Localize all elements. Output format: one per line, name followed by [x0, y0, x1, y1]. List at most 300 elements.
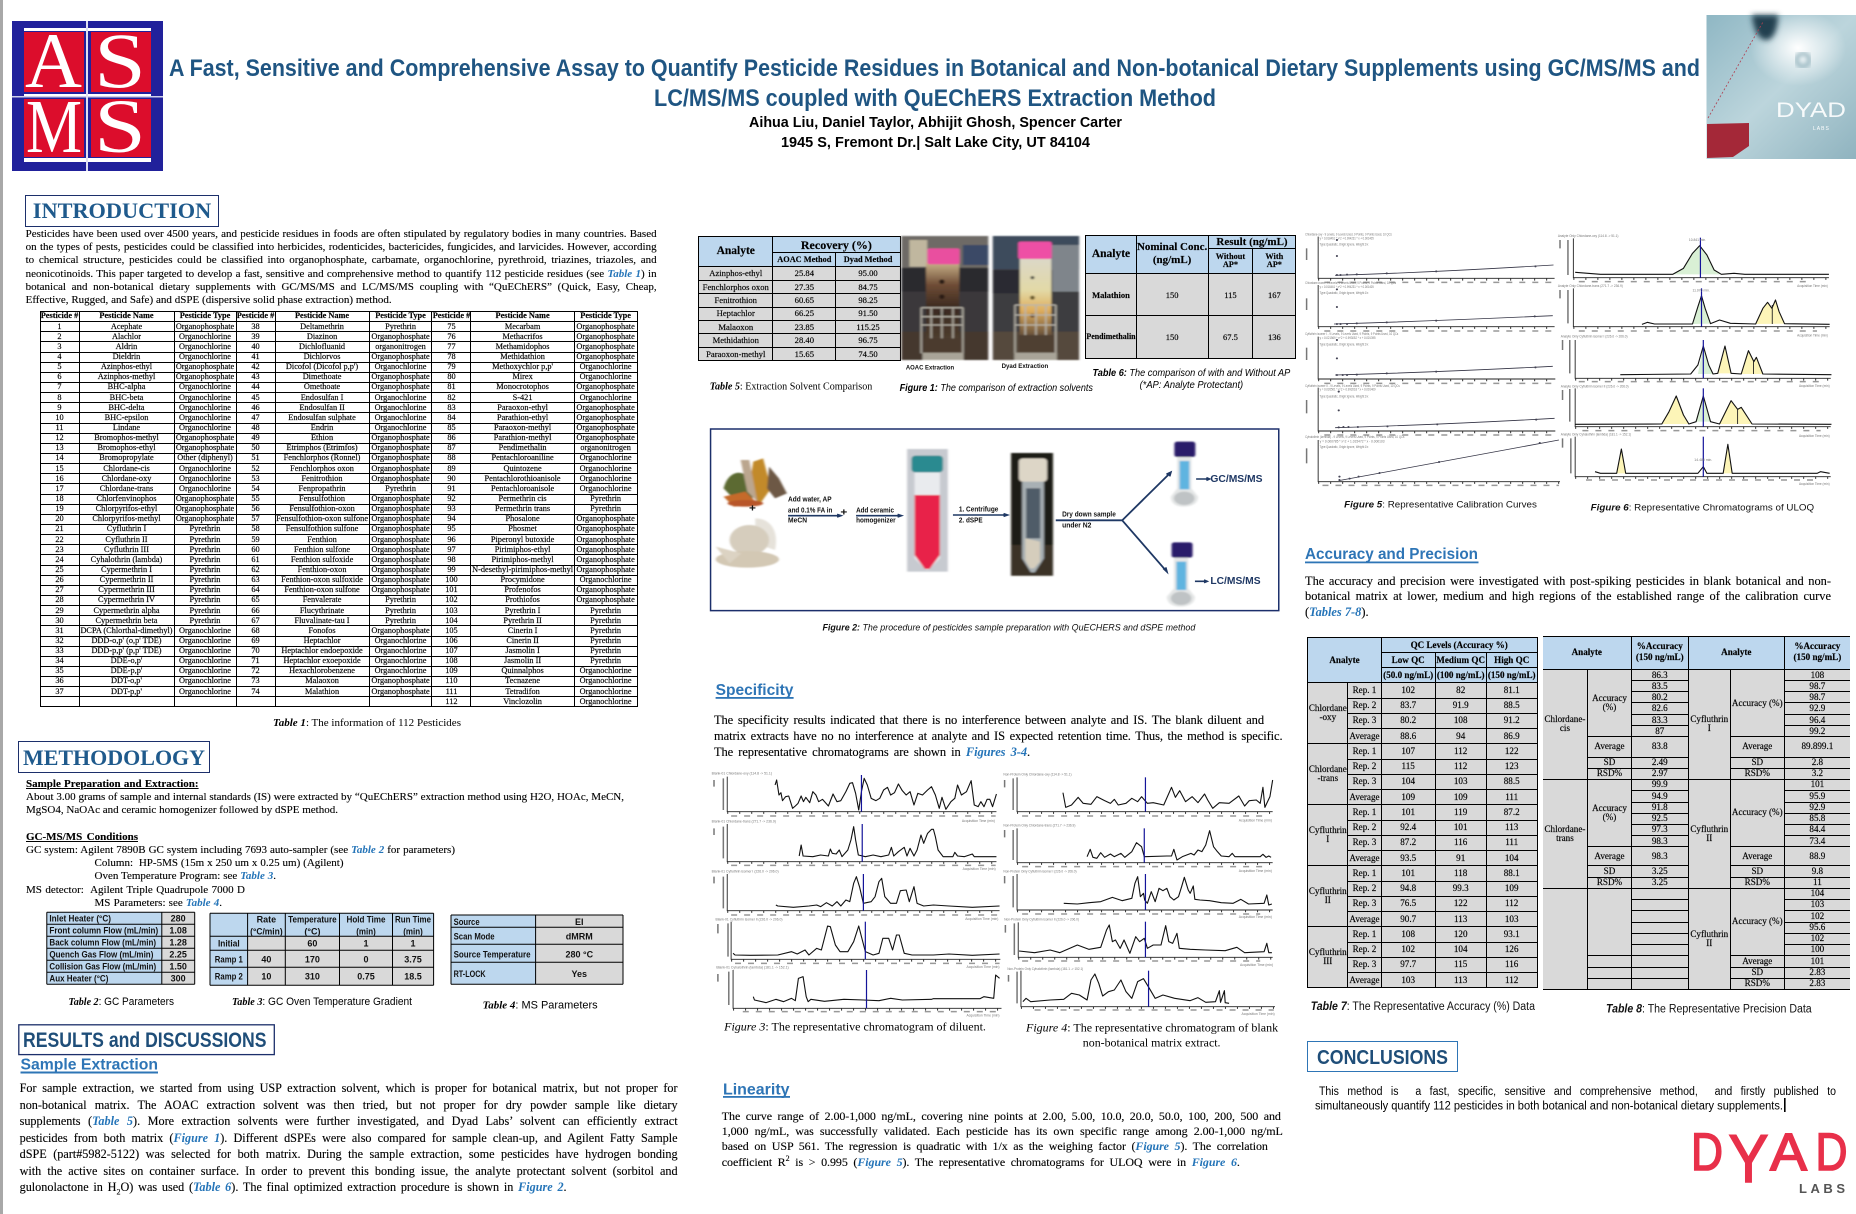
table 8: representative precision data: 108 — [1811, 670, 1824, 680]
table 1: 112 pesticides: Pesticide Name — [99, 312, 154, 320]
table 7: representative accuracy data: 104 — [1454, 944, 1468, 954]
table 1: 112 pesticides: Organophosphate — [176, 372, 234, 381]
table 1: 112 pesticides: Organochlorine — [179, 393, 231, 402]
table 4: MS parameters: Source — [454, 917, 480, 927]
caption: figure 6: Figure 6: Representative Chromatograms of ULOQ — [1591, 503, 1815, 514]
table 8: representative precision data: Average — [1742, 851, 1772, 861]
table 1: 112 pesticides: 35 — [55, 666, 64, 675]
chart: calibration cyfluthrin isomer I — [1305, 332, 1555, 383]
table 8: representative precision data: 98.3 — [1652, 851, 1668, 861]
table 1: 112 pesticides: Fenthion-oxon sulfone — [284, 585, 360, 594]
table 1: 112 pesticides: Pyrethrin — [190, 595, 220, 604]
table 1: 112 pesticides: 40 — [251, 342, 260, 351]
table 8: representative precision data: 102 — [1811, 911, 1824, 921]
table 1: 112 pesticides: Organophosphate — [576, 524, 635, 533]
table 1: 112 pesticides: 48 — [251, 423, 260, 432]
chart: diluent cyfluthrin isomer II: Blank-01 Cyfluthrin isomer II (226.0 -> 206.0) — [716, 917, 783, 921]
table 1: 112 pesticides: Omethoate — [304, 382, 340, 391]
table 1: 112 pesticides: Organophosphate — [371, 575, 430, 584]
table 1: 112 pesticides: Pyrethrin — [385, 616, 416, 625]
table 8: representative precision data: Cyfluthrin — [1690, 824, 1728, 834]
table 7: representative accuracy data: 97.7 — [1400, 959, 1416, 969]
text block: GC-MS/MS conditions: Column: HP-5MS (15m x 250 um x 0.25 um) (Agilent) — [94, 857, 344, 869]
table 1: 112 pesticides: 108 — [445, 656, 458, 665]
table 3: GC oven temperature gradient: (°C) — [304, 926, 320, 936]
table 1: 112 pesticides: Alachlor — [112, 332, 141, 341]
title: LC/MS/MS coupled with QuEChERS Extraction Method — [654, 85, 1216, 112]
table 1: 112 pesticides: Methoxychlor p,p' — [492, 362, 553, 371]
table 1: 112 pesticides: Tecnazene — [505, 677, 540, 685]
caption: figure 2: Figure 2: The procedure of pesticides sample preparation with QuECHERS and dSPE method — [822, 623, 1196, 633]
table 1: 112 pesticides: Dieldrin — [113, 352, 140, 361]
table 1: 112 pesticides: 8 — [57, 393, 62, 402]
figure 6: chromatograms of ULOQ — [1558, 234, 1831, 514]
chart: matrix cyhalothrin — [1007, 966, 1275, 1016]
table 1: 112 pesticides: Mirex — [512, 372, 533, 381]
table 1: 112 pesticides: Fensulfothion-oxon sulfone — [276, 514, 368, 523]
table 1: 112 pesticides: Organochlorine — [580, 484, 632, 493]
table 8: representative precision data: 98.3 — [1652, 836, 1668, 846]
table 7: representative accuracy data: Rep. 1 — [1353, 685, 1376, 695]
table 1: 112 pesticides: 100 — [445, 575, 458, 584]
table 5: extraction solvent comparison — [698, 236, 901, 361]
chart: diluent cyfluthrin isomer II: Acquisition Time (min) — [966, 964, 1000, 969]
table 8: representative precision data: 92.9 — [1809, 703, 1825, 713]
chart: diluent chlordane-trans: Acquisition Time (min) — [963, 866, 996, 871]
table 8: representative precision data: %Accuracy — [1637, 641, 1683, 651]
table 1: 112 pesticides: Organophosphate — [371, 494, 430, 503]
text block: introduction: Effective, Rugged, and Safe) and dSPE (dispersive solid phase extraction) method. — [26, 294, 392, 306]
chart: diluent chlordane-trans: Blank-01 Chlordane-trans (271.7 -> 236.9) — [712, 819, 776, 824]
table 1: 112 pesticides: 86 — [447, 433, 456, 442]
table 7: representative accuracy data: 82 — [1456, 685, 1465, 695]
caption: table 6: Table 6: The comparison of with and Without AP — [1093, 368, 1291, 379]
table 1: 112 pesticides: Jasmolin II — [504, 656, 541, 665]
table 1: 112 pesticides: 99 — [447, 565, 456, 574]
chart: ULOQ cyfluthrin isomer I: Analyte Only Cyfluthrin isomer I (226.0 -> 206.0) — [1561, 334, 1628, 338]
icon: LC vial — [1167, 542, 1195, 607]
text block: sample extraction: pesticides from both matrix (Figure 1). Different dSPEs were also compared for sample clean-up, and Agilent Fatty Sample — [20, 1131, 678, 1145]
table 8: representative precision data: 98.7 — [1809, 681, 1825, 691]
chart: calibration chlordane-oxy: Type:Quadratic, Origin:Ignore, Weight:1/x — [1320, 242, 1368, 246]
table 8: representative precision data: 95.6 — [1809, 922, 1825, 932]
chart: matrix cyfluthrin isomer I: Non-Protein Only Cyfluthrin isomer I (226.0 -> 206.0) — [1003, 869, 1077, 874]
table 1: 112 pesticides: 67 — [251, 616, 260, 625]
table 1: 112 pesticides: Pirimiphos-methyl — [491, 555, 554, 564]
table 7: representative accuracy data: II — [1325, 895, 1331, 905]
table 1: 112 pesticides: 85 — [447, 423, 456, 432]
table 1: 112 pesticides: 81 — [447, 382, 456, 391]
table 5: extraction solvent comparison: 91.50 — [858, 308, 878, 318]
table 1: 112 pesticides: 75 — [447, 322, 456, 331]
table 1: 112 pesticides: 42 — [251, 362, 260, 371]
table 1: 112 pesticides: Organophosphate — [576, 352, 635, 361]
table 3: GC oven temperature gradient: 310 — [305, 971, 320, 981]
table 7: representative accuracy data: Rep. 2 — [1353, 700, 1376, 710]
heading: sample extraction: Sample Extraction — [20, 1056, 158, 1074]
table 1: 112 pesticides: DDT-p,p' — [111, 687, 142, 696]
table 7: representative accuracy data: Average — [1349, 914, 1380, 924]
table 7: representative accuracy data: 94.8 — [1400, 883, 1416, 893]
table 1: 112 pesticides: Organophosphate — [371, 565, 430, 574]
table 5: extraction solvent comparison: Dyad Method — [844, 255, 892, 264]
table 7: representative accuracy data: 109 — [1505, 883, 1519, 893]
chart: matrix cyfluthrin isomer I — [1003, 869, 1273, 919]
chart: calibration cyfluthrin isomer I: Cyfluthrin isomer I - 9 Levels, 9 Levels Used, 9 Points, 9 Points Used, 10 QCs — [1305, 332, 1398, 336]
table 1: 112 pesticides — [40, 311, 638, 707]
table 1: 112 pesticides: Organochlorine — [580, 677, 632, 685]
table 7: representative accuracy data: 112 — [1505, 975, 1518, 985]
table 5: extraction solvent comparison: Fenitrothion — [714, 295, 757, 305]
table 1: 112 pesticides: 61 — [251, 555, 260, 564]
figure 2 frame — [711, 429, 1279, 611]
chart: diluent cyhalothrin — [716, 965, 1001, 1018]
table 8: representative precision data: Average — [1742, 956, 1772, 966]
table 1: 112 pesticides: 73 — [251, 677, 260, 685]
panel: figures 5 and 6 — [1305, 232, 1832, 514]
table 7: representative accuracy data: 112 — [1454, 761, 1467, 771]
table 7: representative accuracy data: Rep. 1 — [1353, 807, 1376, 817]
table 1: 112 pesticides: 62 — [251, 565, 260, 574]
text block: GC-MS/MS conditions: MS Parameters: see Table 4. — [94, 897, 222, 909]
table 7: representative accuracy data: (150 ng/mL) — [1488, 670, 1536, 680]
text block: linearity: coefficient R2 is > 0.995 (Figure 5). The representative chromatograms for ULOQ were in Figure 6. — [722, 1154, 1240, 1169]
table 3: GC oven temperature gradient: Run Time — [395, 914, 431, 924]
table 5: extraction solvent comparison: Heptachlor — [717, 308, 755, 318]
table 4: MS parameters: Source Temperature — [454, 950, 531, 960]
table 1: 112 pesticides: Organochlorine — [179, 484, 231, 493]
table 8: representative precision data: trans — [1556, 833, 1574, 843]
panel: header — [12, 10, 1856, 171]
table 2: GC parameters — [47, 912, 195, 984]
table 2: GC parameters: Inlet Heater (°C) — [49, 914, 111, 924]
table 8: representative precision data: 89.899.1 — [1801, 741, 1833, 751]
chart: diluent cyfluthrin isomer I — [712, 869, 1000, 921]
table 7: representative accuracy data: 111 — [1505, 792, 1518, 802]
table 1: 112 pesticides: 80 — [447, 372, 456, 381]
table 1: 112 pesticides: 90 — [447, 474, 456, 483]
table 3: GC oven temperature gradient — [210, 913, 434, 985]
table 1: 112 pesticides: Organochlorine — [375, 646, 426, 655]
table 1: 112 pesticides: Cyfluthrin III — [104, 545, 149, 554]
step: add ceramic: homogenizer — [856, 515, 896, 524]
table 7: representative accuracy data: 102 — [1401, 944, 1415, 954]
table 6: with and without analyte protectant: 150 — [1166, 332, 1178, 342]
table 1: 112 pesticides: Pyrethrin — [190, 524, 220, 533]
table 1: 112 pesticides: 44 — [251, 382, 260, 391]
table 8: representative precision data: (150 ng/mL) — [1636, 652, 1684, 662]
table 4: MS parameters: 280 °C — [565, 950, 594, 960]
chart: calibration cyfluthrin isomer I: Type:Quadratic, Origin:Ignore, Weight:1/x — [1320, 342, 1368, 346]
text block: GC-MS/MS conditions: GC-MS/MS Conditions — [26, 831, 138, 843]
chart: ULOQ chlordane-oxy: Analyte Only Chlordane-oxy (114.8 -> 51.1) — [1558, 234, 1619, 238]
text block: GC-MS/MS conditions: Oven Temperature Program: see Table 3. — [94, 870, 276, 882]
table 7: representative accuracy data: 88.1 — [1504, 868, 1520, 878]
table 1: 112 pesticides: Organochlorine — [179, 413, 231, 422]
table 1: 112 pesticides: 27 — [55, 585, 64, 594]
table 1: 112 pesticides: Acephate — [111, 322, 142, 331]
table 1: 112 pesticides: 70 — [251, 646, 260, 655]
table 1: 112 pesticides: 17 — [55, 484, 64, 493]
table 1: 112 pesticides: Organophosphate — [371, 677, 430, 685]
table 1: 112 pesticides: DDD-p,p' (p,p' TDE) — [91, 646, 162, 655]
table 6: with and without analyte protectant: Nominal Conc. — [1137, 241, 1207, 253]
table 2: GC parameters: 2.25 — [169, 950, 187, 960]
table 5: extraction solvent comparison: 66.25 — [795, 308, 814, 318]
table 1: 112 pesticides: 3 — [57, 342, 62, 351]
table 1: 112 pesticides: 16 — [55, 474, 64, 483]
table 2: GC parameters: 1.28 — [169, 938, 187, 948]
table 1: 112 pesticides: Organochlorine — [375, 403, 426, 412]
table 1: 112 pesticides: Organochlorine — [179, 687, 231, 696]
table 7: representative accuracy data: (100 ng/mL) — [1437, 670, 1485, 680]
table 7: representative accuracy data: 112 — [1454, 746, 1467, 756]
table 1: 112 pesticides: 47 — [251, 413, 260, 422]
icon: Dyad Labs logo: D — [1816, 1123, 1848, 1182]
table 1: 112 pesticides: Chlorpyrifos-methyl — [92, 514, 161, 523]
table 3: GC oven temperature gradient: 40 — [261, 954, 271, 964]
table 1: 112 pesticides: Pyrethrin — [385, 606, 416, 614]
table 1: 112 pesticides: 59 — [251, 535, 260, 544]
table 8: representative precision data: Average — [1594, 851, 1625, 861]
table 1: 112 pesticides: 84 — [447, 413, 456, 422]
table 5: extraction solvent comparison: 28.40 — [795, 335, 814, 345]
table 3: GC oven temperature gradient: 170 — [305, 954, 320, 964]
table 1: 112 pesticides: Jasmolin I — [505, 646, 540, 655]
chart: matrix chlordane-trans — [1003, 823, 1273, 873]
table 1: 112 pesticides: Organochlorine — [179, 332, 231, 341]
table 3: GC oven temperature gradient: (min) — [403, 926, 423, 936]
table 1: 112 pesticides: Deltamethrin — [300, 322, 344, 331]
caption: figure 1: Figure 1: The comparison of extraction solvents — [900, 383, 1093, 394]
step: add water: Add water, AP — [788, 494, 832, 503]
table 7: representative accuracy data: 76.5 — [1400, 898, 1416, 908]
text block: GC-MS/MS conditions: GC system: Agilent 7890B GC system including 7693 auto-sampler (see Table 2 for parameters) — [26, 844, 455, 856]
table 1: 112 pesticides: Pyrethrin — [385, 595, 416, 604]
table 1: 112 pesticides: 26 — [55, 575, 64, 584]
authors and address: Aihua Liu, Daniel Taylor, Abhijit Ghosh, Spencer Carter — [749, 115, 1122, 131]
chart: calibration chlordane-trans — [1305, 281, 1555, 331]
table 8: representative precision data: RSD% — [1745, 768, 1770, 778]
table 8: representative precision data — [1543, 636, 1850, 990]
table 1: 112 pesticides: Flucythrinate — [300, 606, 344, 614]
text block: linearity: based on USP 561. The regression is quadratic with 1/x as the weighing factor (Figure 5). The correlation — [722, 1139, 1268, 1153]
table 1: 112 pesticides: Organochlorine — [179, 636, 231, 645]
table 1: 112 pesticides: Organochlorine — [580, 393, 632, 402]
table 8: representative precision data: Analyte — [1572, 647, 1602, 657]
table 1: 112 pesticides: Bromopropylate — [99, 453, 154, 462]
text block: specificity — [714, 713, 1282, 758]
table 1: 112 pesticides: Organophosphate — [176, 362, 234, 371]
table 1: 112 pesticides: 51 — [251, 453, 260, 462]
table 1: 112 pesticides: Organophosphate — [371, 332, 430, 341]
table 2: GC parameters: Collision Gas Flow (mL/min) — [49, 962, 156, 972]
table 1: 112 pesticides: 37 — [55, 687, 64, 696]
text block: linearity: 1,000 ng/mL, was successfully validated. Each pesticide has its own specific range among 2.00-1,000 ng/mL — [722, 1124, 1283, 1138]
table 7: representative accuracy data: 93.1 — [1504, 929, 1520, 939]
table 1: 112 pesticides: Vinclozolin — [503, 697, 542, 706]
table 1: 112 pesticides: Organochlorine — [179, 382, 231, 391]
table 8: representative precision data: II — [1706, 833, 1712, 843]
table 1: 112 pesticides: Organochlorine — [580, 453, 632, 462]
chart: ULOQ cyhalothrin: Analyte Only Cyhalothrin (lambda) (181.1 -> 152.1) — [1561, 433, 1632, 437]
chart: calibration chlordane-trans: Type:Quadratic, Origin:Ignore, Weight:1/x — [1320, 291, 1368, 295]
table 7: representative accuracy data: 88.5 — [1504, 776, 1520, 786]
table 1: 112 pesticides: Pyrethrin — [590, 656, 621, 665]
table 1: 112 pesticides: Pyrethrin — [190, 545, 220, 554]
step: centrifuge: 1. Centrifuge — [959, 504, 999, 513]
table 1: 112 pesticides: Organophosphate — [576, 423, 635, 432]
table 1: 112 pesticides: Organochlorine — [375, 393, 426, 402]
table 1: 112 pesticides: Methidathion — [500, 352, 545, 361]
table 1: 112 pesticides: 64 — [251, 585, 260, 594]
table 7: representative accuracy data: 91.9 — [1453, 700, 1469, 710]
table 1: 112 pesticides: Pyrethrin — [590, 646, 621, 655]
chart: calibration chlordane-oxy: y = 0.018461 * x^2 + 0.994231 * x + 0.001405 — [1320, 236, 1374, 240]
table 7: representative accuracy data: 91.2 — [1504, 715, 1520, 725]
step: add water — [788, 494, 832, 524]
table 1: 112 pesticides: Organophosphate — [371, 545, 430, 554]
table 1: 112 pesticides: 32 — [55, 636, 64, 645]
text block: linearity — [722, 1109, 1283, 1169]
caption: table 3: Table 3: GC Oven Temperature Gradient — [232, 996, 412, 1008]
table 1: 112 pesticides: Heptachlor — [304, 636, 340, 645]
table 1: 112 pesticides: 45 — [251, 393, 260, 402]
table 1: 112 pesticides: Organophosphate — [576, 413, 635, 422]
table 4: MS parameters: dMRM — [566, 932, 593, 942]
chart: matrix chlordane-oxy: Non-Protein Only Chlordane-oxy (114.8 -> 51.1) — [1003, 772, 1072, 776]
table 7: representative accuracy data: 104 — [1505, 853, 1519, 863]
heading: conclusions: CONCLUSIONS — [1317, 1046, 1448, 1069]
icon: ASMS logo: S — [94, 17, 146, 104]
table 8: representative precision data: (%) — [1603, 702, 1616, 712]
table 1: 112 pesticides: 39 — [251, 332, 260, 341]
text block: specificity: matrix extracts have no no interference at analyte and IS expected retention time. Thus, the method is specific. — [714, 729, 1282, 743]
chart: ULOQ cyfluthrin isomer II: Acquisition Time (min) — [1799, 434, 1830, 438]
chart: matrix chlordane-trans: Non-Protein Only Chlordane-trans (271.7 -> 236.9) — [1003, 823, 1076, 828]
table 7: representative accuracy data: 116 — [1505, 959, 1518, 969]
text block: introduction: on the types of pests, pesticides could be classified into herbicides, rodenticides, bactericides, fungicides, and larvicides. However, according — [26, 241, 657, 253]
chart: calibration cyhalothrin: Cyhalothrin (lambda) - 9 Levels, 9 Levels Used, 9 Points, 9 Points Used, 10 QCs — [1305, 435, 1404, 439]
table 1: 112 pesticides: organonitrogen — [580, 443, 631, 452]
table 7: representative accuracy data: 88.5 — [1504, 700, 1520, 710]
table 1: 112 pesticides: Organophosphate — [176, 322, 234, 331]
table 1: 112 pesticides: Organochlorine — [580, 474, 632, 483]
table 1: 112 pesticides: Fensulfothion — [299, 494, 345, 503]
table 5: extraction solvent comparison: Fenchlorphos oxon — [703, 282, 769, 292]
text block: introduction: to chemical structure, pesticides could be classified into organophosphate, carbamate, organochlorine, pyrethroid, triazines, triazoles, and — [26, 254, 657, 266]
table 7: representative accuracy data: Cyfluthrin — [1309, 825, 1347, 835]
table 7: representative accuracy data: Chlordane — [1309, 703, 1347, 713]
table 1: 112 pesticides: Chlordane-trans — [100, 484, 153, 493]
table 1: 112 pesticides: 97 — [447, 545, 456, 554]
table 1: 112 pesticides: Mecarbam — [505, 322, 540, 331]
text block: sample preparation: MgSO4, NaOAc and ceramic homogenizer followed by dSPE method. — [26, 804, 338, 816]
panel: figure 2 procedure — [710, 428, 1280, 633]
table 7: representative accuracy data — [1307, 637, 1538, 988]
table 1: 112 pesticides: Chlordane-cis — [103, 464, 150, 473]
table 1: 112 pesticides: Paraoxon-ethyl — [497, 403, 548, 412]
table 8: representative precision data: Average — [1594, 741, 1625, 751]
chart: matrix cyfluthrin isomer I: Acquisition Time (min) — [1239, 914, 1272, 919]
table 1: 112 pesticides: Fenpropathrin — [299, 484, 346, 493]
table 1: 112 pesticides: Other (diphenyl) — [177, 453, 233, 462]
table 6: with and without analyte protectant: Malathion — [1092, 290, 1130, 300]
table 1: 112 pesticides: 55 — [251, 494, 260, 503]
table 7: representative accuracy data: 101 — [1401, 807, 1415, 817]
table 1: 112 pesticides: Cypermethrin IV — [98, 595, 155, 604]
table 1: 112 pesticides: Organochlorine — [179, 464, 231, 473]
table 7: representative accuracy data: Rep. 2 — [1353, 822, 1376, 832]
table 1: 112 pesticides: Lindane — [113, 423, 140, 432]
table 7: representative accuracy data: High QC — [1494, 655, 1529, 665]
chart: calibration cyfluthrin isomer II: y = 0.026501 * x^2 + 0.992018 * x + 0.001409 — [1320, 388, 1376, 392]
table 8: representative precision data: Accuracy (%) — [1732, 698, 1783, 708]
panel: linearity — [722, 1082, 1283, 1169]
step: add ceramic: Add ceramic — [856, 505, 894, 514]
arrow: add ceramic — [856, 514, 902, 517]
figure 1: comparison of extraction solvents — [902, 236, 1079, 371]
table 8: representative precision data: Cyfluthrin — [1690, 714, 1728, 724]
table 7: representative accuracy data: 108 — [1454, 715, 1468, 725]
table 5: extraction solvent comparison: 96.75 — [858, 335, 878, 345]
table 1: 112 pesticides: 49 — [251, 433, 260, 442]
chart: diluent cyfluthrin isomer I: Blank-01 Cyfluthrin isomer I (226.0 -> 206.0) — [712, 869, 779, 873]
table 1: 112 pesticides: Pyrethrin — [590, 636, 621, 645]
table 1: 112 pesticides: Dichlorvos — [304, 352, 340, 361]
table 1: 112 pesticides: Malaoxon — [305, 677, 339, 685]
table 1: 112 pesticides: Pyrethrin — [190, 616, 220, 625]
table 8: representative precision data: I — [1708, 723, 1711, 733]
step: centrifuge — [959, 504, 999, 524]
table 1: 112 pesticides: 79 — [447, 362, 456, 371]
icon: ASMS logo: S — [94, 85, 146, 169]
table 7: representative accuracy data: Rep. 1 — [1353, 929, 1376, 939]
table 1: 112 pesticides: Prothiofos — [505, 595, 540, 604]
table 7: representative accuracy data: 108 — [1401, 929, 1415, 939]
table 6: with and without analyte protectant: 136 — [1268, 332, 1281, 342]
table 1: 112 pesticides: 21 — [55, 524, 64, 533]
text block: GC-MS/MS conditions: MS detector: Agilent Triple Quadrupole 7000 D — [26, 884, 245, 896]
chart: calibration chlordane-oxy: Chlordane-oxy - 9 Levels, 9 Levels Used, 9 Points, 9 Points Used, 10 QCs — [1305, 232, 1392, 236]
chart: ULOQ chlordane-oxy: Acquisition Time (min) — [1797, 284, 1828, 288]
text block: sample preparation: Sample Preparation and Extraction: — [26, 778, 199, 790]
table 8: representative precision data: 82.6 — [1652, 703, 1668, 713]
table 1: 112 pesticides: Cinerin II — [506, 636, 539, 645]
table 1: 112 pesticides: Organochlorine — [580, 687, 632, 696]
table 1: 112 pesticides: Permethrin cis — [498, 494, 547, 503]
table 8: representative precision data: 2.97 — [1652, 768, 1668, 778]
table 1: 112 pesticides: Malathion — [305, 687, 339, 696]
table 1: 112 pesticides: 50 — [251, 443, 260, 452]
table 8: representative precision data: 3.25 — [1652, 866, 1668, 876]
table 1: 112 pesticides: Organophosphate — [176, 504, 234, 513]
table 7: representative accuracy data: 90.7 — [1400, 914, 1416, 924]
table 1: 112 pesticides: Organophosphate — [371, 524, 430, 533]
table 6: with and without analyte protectant: Pendimethalin — [1086, 332, 1136, 341]
table 1: 112 pesticides: Organophosphate — [176, 433, 234, 442]
table 1: 112 pesticides: BHC-beta — [110, 393, 143, 402]
text block: specificity: The representative chromatograms are shown in Figures 3-4. — [714, 744, 1030, 758]
table 1: 112 pesticides: Organophosphate — [576, 403, 635, 412]
chart: diluent cyhalothrin: Blank-01 Cyhalothrin (lambda) (181.1 -> 152.1) — [716, 965, 789, 969]
table 7: representative accuracy data: 92.4 — [1400, 822, 1416, 832]
table 1: 112 pesticides: Organophosphate — [576, 514, 635, 523]
table 7: representative accuracy data: 120 — [1454, 929, 1468, 939]
table 7: representative accuracy data: Rep. 3 — [1353, 776, 1376, 786]
table 1: 112 pesticides: Pyrethrin — [190, 555, 220, 564]
table 7: representative accuracy data: 87.2 — [1504, 807, 1520, 817]
